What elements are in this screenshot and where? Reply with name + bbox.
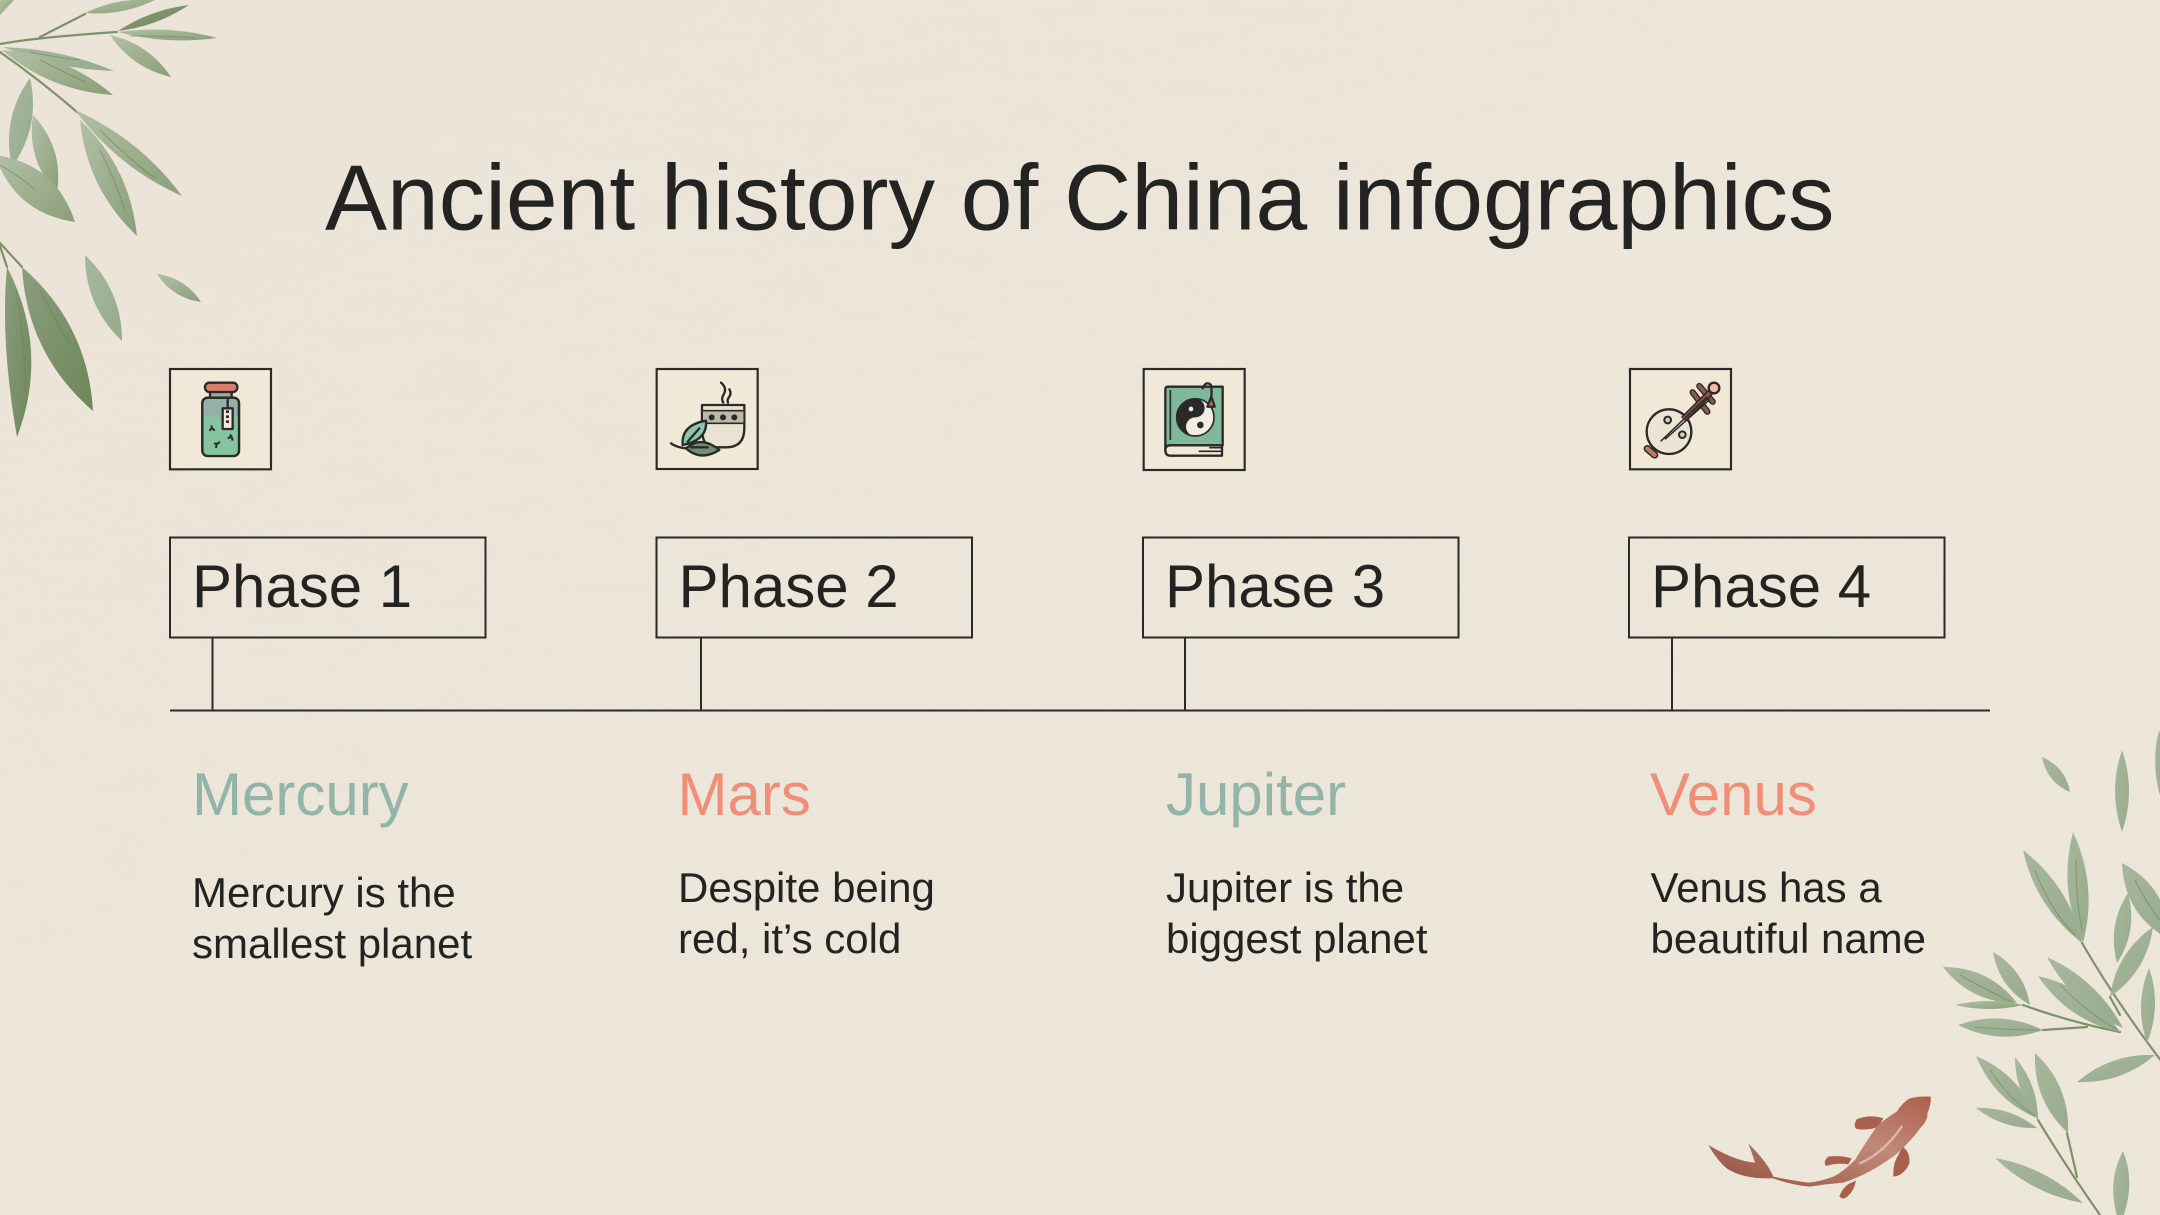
text block: Mars: Mars	[678, 761, 811, 828]
text block: Mercury: Mercury	[192, 761, 409, 828]
text block: Mercury: smallest planet	[192, 920, 472, 967]
timeline axis	[170, 710, 1990, 712]
title: Ancient history of China infographics	[325, 146, 1834, 250]
phase 3 block	[1143, 538, 1458, 710]
text block: Venus	[1650, 761, 1926, 962]
text block: Jupiter: Jupiter is the	[1166, 864, 1404, 911]
icon: book with yin yang	[1144, 369, 1245, 470]
text block: Jupiter: Jupiter	[1166, 761, 1346, 828]
icon: pipa lute	[1630, 369, 1731, 469]
phase 4 block: Phase 4	[1651, 553, 1871, 620]
text block: Mars	[678, 761, 935, 962]
phase 2 block	[656, 538, 972, 710]
text block: Mars: Despite being	[678, 864, 935, 911]
phase 3 block: Phase 3	[1165, 553, 1385, 620]
text block: Mercury: Mercury is the	[192, 869, 456, 916]
phase 1 block	[170, 538, 486, 710]
phase 1 block: Phase 1	[192, 553, 412, 620]
koi fish	[1708, 1097, 1931, 1198]
text block: Venus: Venus has a	[1650, 864, 1882, 911]
text block: Venus: beautiful name	[1650, 915, 1926, 962]
leaves: top left branch	[0, 0, 217, 437]
text block: Venus: Venus	[1650, 761, 1817, 828]
phase 4 block	[1629, 538, 1944, 710]
leaves: bottom right branch	[1943, 730, 2160, 1215]
text block: Jupiter: biggest planet	[1166, 915, 1428, 962]
phase 2 block: Phase 2	[678, 553, 899, 620]
icon: tea cup with leaves	[657, 369, 758, 469]
text block: Jupiter	[1166, 761, 1428, 962]
icon: jar	[170, 369, 271, 469]
text block: Mars: red, it’s cold	[678, 915, 901, 962]
text block: Mercury	[192, 761, 472, 967]
